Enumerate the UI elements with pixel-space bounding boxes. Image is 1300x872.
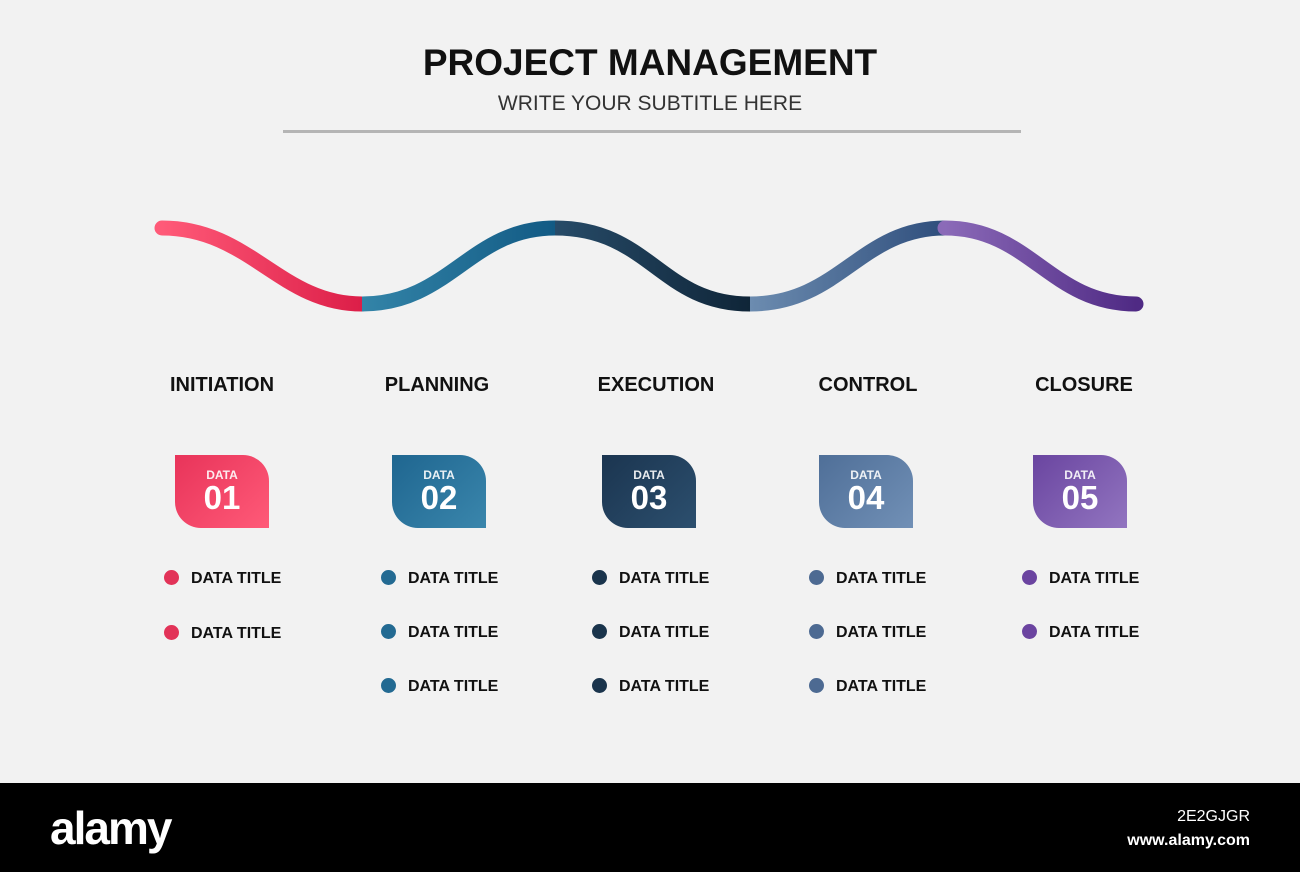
footer bar xyxy=(0,783,1300,872)
list 3 xyxy=(592,570,709,695)
box 01 xyxy=(175,455,269,528)
headings: INITIATION xyxy=(170,374,274,396)
box 01: 01 xyxy=(204,479,240,516)
text: PLANNING xyxy=(385,374,489,396)
list 3: DATA TITLE xyxy=(619,678,709,695)
box 03 xyxy=(602,455,696,528)
box 01: DATA xyxy=(206,468,238,482)
box 04: 04 xyxy=(848,479,884,516)
list 1 xyxy=(164,570,281,642)
footer bar: 2E2GJGR xyxy=(1177,808,1250,825)
list 2: DATA TITLE xyxy=(408,570,498,587)
list 2: DATA TITLE xyxy=(408,678,498,695)
list 4: DATA TITLE xyxy=(836,678,926,695)
text: CONTROL xyxy=(819,374,917,396)
box 02 xyxy=(392,455,486,528)
text: CLOSURE xyxy=(1035,374,1133,396)
list 3: DATA TITLE xyxy=(619,570,709,587)
box 03: 03 xyxy=(631,479,667,516)
box 05: DATA xyxy=(1064,468,1096,482)
divider xyxy=(283,130,1021,133)
box 04 xyxy=(819,455,913,528)
box 02: 02 xyxy=(421,479,457,516)
list 4: DATA TITLE xyxy=(836,570,926,587)
text: EXECUTION xyxy=(598,374,714,396)
box 05: 05 xyxy=(1062,479,1098,516)
box 02: DATA xyxy=(423,468,455,482)
title: PROJECT MANAGEMENT xyxy=(423,42,877,83)
list 2: DATA TITLE xyxy=(408,624,498,641)
list 4: DATA TITLE xyxy=(836,624,926,641)
list 2 xyxy=(381,570,498,695)
box 03: DATA xyxy=(633,468,665,482)
list 5 xyxy=(1022,570,1139,641)
box 04: DATA xyxy=(850,468,882,482)
box 05 xyxy=(1033,455,1127,528)
list 4 xyxy=(809,570,926,695)
footer bar: alamy xyxy=(50,802,170,854)
wave timeline xyxy=(154,220,1144,312)
footer bar: www.alamy.com xyxy=(1127,832,1250,849)
list 1: DATA TITLE xyxy=(191,570,281,587)
list 5: DATA TITLE xyxy=(1049,624,1139,641)
list 1: DATA TITLE xyxy=(191,625,281,642)
subtitle: WRITE YOUR SUBTITLE HERE xyxy=(498,92,802,115)
list 5: DATA TITLE xyxy=(1049,570,1139,587)
list 3: DATA TITLE xyxy=(619,624,709,641)
